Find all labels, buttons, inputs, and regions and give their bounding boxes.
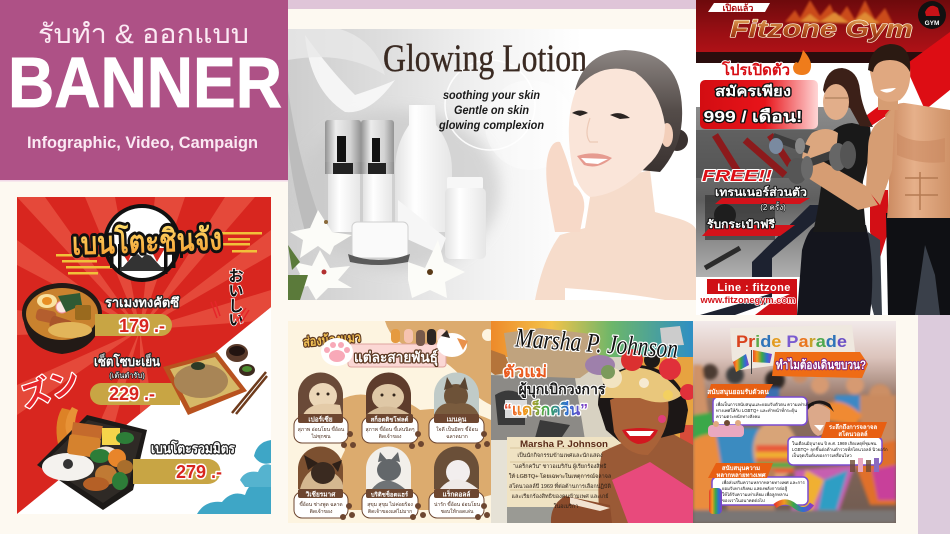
pill: price 229: 229 .- (109, 384, 155, 404)
heading: menu title: เบนโตะชินจัง (71, 220, 223, 262)
text: biography: ให้ LGBTQ+ โดยเฉพาะในเหตุการณ์จลาจล (509, 472, 611, 480)
callout: Stonewall memorial: ระลึกถึงการจลาจล (829, 423, 877, 431)
text: item 3 name: เบนโตะรวมมิตร (151, 440, 235, 456)
card: Scottish Fold (362, 372, 418, 443)
card: Maine Coon: ใจดี เป็นมิตร ขี้อ้อน (436, 424, 478, 433)
icon: lily flowers (288, 210, 465, 300)
decor: red strip two (702, 225, 795, 236)
callout: gender diversity: ให้ได้รับความเท่าเทียม เพื่อลูกหลาน (722, 491, 788, 498)
icon: big paw (321, 338, 353, 366)
tag: now open (708, 3, 770, 13)
icon: gym logo (918, 1, 946, 29)
callout: Stonewall memorial: สโตนวอลล์ (838, 430, 868, 438)
decor: hex strip (696, 52, 922, 63)
icon: flame (793, 50, 811, 75)
pill: price 179 (95, 314, 172, 336)
heading: cat title box (348, 344, 446, 367)
text: oishii: お (228, 265, 244, 286)
text: headline line 1: ตัวแม่ (503, 363, 547, 381)
callout: support and acceptance: เพื่อเป็นการสนับสนุนเเละยอมรับตัวตน ความเท่าเทียม (716, 400, 814, 408)
card: British Shorthair (362, 446, 418, 518)
decor: torn paper (730, 325, 856, 370)
panel: bento menu poster (14, 197, 271, 514)
heading: cat title box: แต่ละสายพันธุ์ (354, 349, 438, 366)
box: contact (700, 279, 797, 315)
icon: small bottle (445, 177, 486, 259)
text: item 2 note: (เต้นตำรับ) (109, 371, 145, 380)
heading: promo: โปรเปิดตัว (721, 60, 790, 79)
icon: bento box (37, 407, 147, 510)
text: oishii (211, 265, 249, 330)
card: Siamese: ติดเจ้าของ (310, 508, 333, 515)
card: Persian (294, 372, 348, 443)
callout: gender diversity: เพื่อส่งเสริมความหลากหลายทางเพศ และการ (722, 479, 806, 485)
illustration: flower crown (585, 349, 696, 402)
callout: support and acceptance (707, 384, 814, 425)
icon: pump bottles (325, 120, 394, 232)
callout: support and acceptance: ทางเพศให้กับ LGBTQ+ และทำหน้าที่กระตุ้น (716, 407, 797, 414)
card: Persian: ไม่ซุกซน (310, 433, 331, 440)
text: line id: Line : fitzone (717, 282, 791, 294)
callout: Stonewall memorial (788, 422, 888, 465)
decor: soft shadows (300, 110, 500, 270)
text: offer line: สมัครเพียง (715, 83, 791, 99)
card: Ragdoll: แร็กดอลล์ (443, 490, 470, 498)
heading: BANNER: BANNER (8, 44, 282, 123)
card: Maine Coon: เมนคูน (447, 416, 467, 424)
decor: black and red diagonals (752, 32, 950, 315)
text: biography: “แดร็กควีน” ชาวอเมริกัน ผู้เรียกร้องสิทธิ (513, 462, 607, 470)
callout: support and acceptance: สนับสนุนยอมรับตัวตน (707, 388, 769, 396)
decor: red strip one (715, 198, 810, 204)
text: oishii: い (228, 309, 244, 330)
text: benefits: Gentle on skin (454, 105, 529, 117)
text: biography: เป็นนักกิจกรรมข้ามเพศและนักแสดง (517, 451, 603, 459)
decor: grey gym photo (696, 107, 863, 277)
text: item 2 name: เซ็ตโซบะเย็น (94, 352, 160, 369)
card: Scottish Fold: สุภาพ ขี้อ้อน ขี้เล่นนิดๆ (365, 424, 415, 433)
callout: support and acceptance: ความตระหนักทางสังคม (716, 414, 760, 419)
text: benefits (438, 90, 544, 132)
card: Persian: สุภาพ อ่อนโยน ขี้อ้อน (298, 424, 345, 433)
heading: Marsha name: Marsha P. Johnson (520, 439, 608, 450)
pill: price 279 (133, 459, 222, 484)
text: services: Infographic, Video, Campaign (27, 134, 258, 152)
callout: gender diversity: ยอมรับทางสังคม แสดงพลังการต่อสู้ (722, 486, 787, 492)
illustration: woman (535, 50, 696, 300)
text: oishii: い (228, 280, 244, 301)
panel: banner heading (0, 0, 288, 182)
decor: flames (785, 0, 893, 24)
panel: Fitzone Gym ad (696, 0, 950, 315)
text: two sessions: (2 ครั้ง) (760, 201, 786, 212)
icon: rainbow blocks (709, 488, 722, 514)
panel: Pride Parade explainer (693, 321, 896, 523)
banner: question: ทำไมต้องเดินขบวน? (776, 357, 866, 372)
icon: people group (708, 420, 744, 437)
card: British Shorthair: สุขุม สุขุม ไม่ค่อยร้อง (367, 501, 413, 508)
icon: paws row and cartoon cat (391, 329, 468, 357)
text: 999 per month: 999 / เดือน! (704, 108, 802, 126)
icon: marchers (850, 458, 879, 472)
decor: small paw prints (340, 431, 490, 520)
panel: Glowing Lotion ad (288, 29, 696, 300)
heading: gym name: Fitzone Gym (730, 16, 913, 43)
text: biography: และเรียกร้องสิทธิของคนข้ามเพศ และเกย์ (511, 493, 609, 500)
decor: feather and silk (288, 29, 512, 229)
callout: gender diversity: สนับสนุนความ (722, 464, 760, 472)
icon: gym logo: GYM (925, 20, 939, 27)
decor: blue waves (197, 440, 271, 514)
card: Scottish Fold: ติดเจ้าของ (379, 433, 402, 440)
text: biography: ในอเมริกา (554, 503, 578, 510)
text: biography: สโตนวอลล์ปี 1969 ที่ต่อต้านการเลือกปฏิบัติ (509, 482, 611, 490)
card: Siamese: ขี้อ้อน ช่างพูด ฉลาด (299, 499, 343, 508)
icon: jar and lid (348, 200, 446, 265)
icon: rainbow flags (733, 350, 772, 374)
text: headline line 2: ผู้บุกเบิกวงการ (518, 381, 606, 398)
pill: price 179: 179 .- (119, 316, 165, 336)
card: British Shorthair: บริติชช็อตแฮร์ (371, 490, 409, 498)
illustration: smiling face (806, 400, 834, 436)
card: Siamese: วิเชียรมาศ (305, 490, 336, 498)
heading: cat title upper: ส่องน้องแมว (302, 330, 361, 350)
top lilac strip (288, 0, 696, 9)
icon: large bottle (395, 105, 452, 232)
illustration: Marsha portrait (551, 365, 693, 523)
card: British Shorthair: ติดเจ้าของแต่ไม่มาก (368, 508, 412, 515)
card: Ragdoll (429, 446, 484, 518)
decor: rainbow sky (491, 321, 693, 357)
tag: now open: เปิดแล้ว (722, 3, 754, 13)
text: oishii: し (228, 295, 244, 316)
text: benefits: soothing your skin (443, 90, 540, 102)
card: Ragdoll: ชอบให้กอดเล่น (441, 508, 474, 515)
heading: Thai service line: รับทำ & ออกแบบ (38, 19, 249, 49)
callout: Stonewall memorial: เป็นจุดเริ่มต้นของการเคลื่อนไหว (792, 451, 852, 459)
pill: price 279: 279 .- (176, 462, 222, 482)
icon: Fuji emblem (103, 204, 183, 282)
text: FREE: FREE!! (702, 168, 773, 185)
icon: ramen bowl (22, 283, 102, 354)
illustration: woman athlete (797, 68, 873, 315)
text: item 1 name: ราเมงทงคัตซึ (105, 295, 180, 310)
right lilac strip (918, 315, 950, 534)
decor: note paper (507, 437, 623, 523)
decor: torn paper (491, 326, 684, 382)
card: Maine Coon (429, 372, 484, 443)
card: Scottish Fold: สก็อตติชโฟลด์ (371, 414, 409, 424)
card: Ragdoll: น่ารัก ขี้อ้อน อ่อนโยน (434, 499, 481, 508)
text: personal trainer: เทรนเนอร์ส่วนตัว (715, 185, 807, 199)
icon: dumbbells (769, 133, 856, 184)
card: Persian: เปอร์เซีย (308, 416, 333, 424)
callout: gender diversity (708, 463, 808, 505)
heading: Marsha script name: Marsha P. Johnson (514, 322, 679, 364)
illustration: man athlete (803, 44, 950, 315)
icon: rainbow ribbon (775, 502, 812, 510)
callout: Stonewall memorial: LGBTQ+ ลุกขึ้นต่อต้านตำรวจที่สโตนวอลล์ นิวยอร์ก (792, 446, 888, 453)
decor: newspaper (491, 375, 585, 523)
icon: soba tray (163, 344, 267, 415)
text: katakana zun: ズン (14, 356, 84, 416)
decor: tan blobs (335, 321, 494, 510)
decor: crowd scene (693, 364, 896, 523)
heading: Pride Parade: Pride Parade (736, 332, 847, 351)
card: Siamese (294, 446, 348, 518)
pill: price 229 (90, 383, 180, 405)
card: Maine Coon: ฉลาดมาก (446, 434, 468, 440)
panel: Marsha P. Johnson collage (491, 321, 696, 523)
text: website: www.fitzonegym.com (700, 295, 796, 306)
callout: gender diversity: หลากหลายทางเพศ (716, 472, 766, 479)
callout: Stonewall memorial: ในเดือนมิถุนายน ปี ค.ศ. 1969 เกิดเหตุที่ชุมชน (792, 440, 877, 447)
callout: gender diversity: ของเราในอนาคตต่อไป (722, 498, 765, 503)
text: benefits: glowing complexion (438, 120, 544, 132)
text: headline line 3: “แดร็กควีน” (504, 398, 588, 419)
banner: question (772, 352, 868, 378)
panel: cat breeds infographic (288, 321, 494, 523)
text: biography (509, 451, 611, 510)
heading: product title: Glowing Lotion (383, 37, 587, 80)
decor: yellow speed lines (56, 232, 262, 274)
text: free bag: รับกระเป๋าฟรี (707, 218, 775, 231)
box: price offer (700, 80, 818, 129)
